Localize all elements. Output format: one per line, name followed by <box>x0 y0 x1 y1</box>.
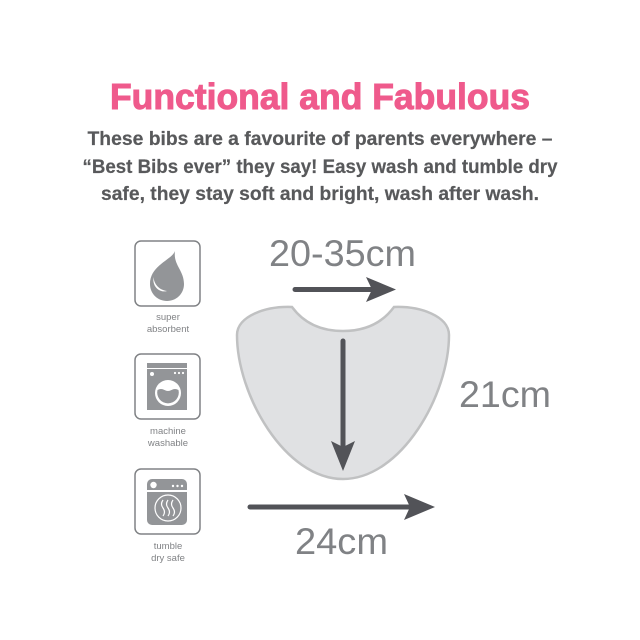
intro text: These bibs are a favourite of parents everywhere – <box>88 128 553 150</box>
caption: machine washable: washable <box>147 438 188 449</box>
caption: tumble dry safe: tumble <box>154 541 182 552</box>
arrow: bib width <box>250 494 435 520</box>
arrow: neck width <box>295 277 396 302</box>
caption: tumble dry safe: dry safe <box>151 553 185 564</box>
bib shape <box>237 307 449 479</box>
intro text <box>82 128 558 205</box>
caption: machine washable: machine <box>150 426 186 437</box>
label: 20-35cm: 20-35cm <box>269 233 416 274</box>
icon: machine washable <box>135 354 200 419</box>
caption: tumble dry safe <box>151 541 185 564</box>
caption: super absorbent <box>147 312 189 335</box>
intro text: “Best Bibs ever” they say! Easy wash and tumble dry <box>82 156 558 178</box>
arrow: bib height <box>331 341 355 471</box>
caption: super absorbent: absorbent <box>147 324 189 335</box>
icon: tumble dry safe <box>135 469 200 534</box>
label: 21cm: 21cm <box>459 374 551 415</box>
caption: machine washable <box>147 426 188 449</box>
label: 24cm: 24cm <box>295 521 388 562</box>
caption: super absorbent: super <box>156 312 180 323</box>
title: Functional and Fabulous <box>110 76 530 117</box>
icon: super absorbent <box>135 241 200 306</box>
intro text: safe, they stay soft and bright, wash after wash. <box>101 183 539 205</box>
